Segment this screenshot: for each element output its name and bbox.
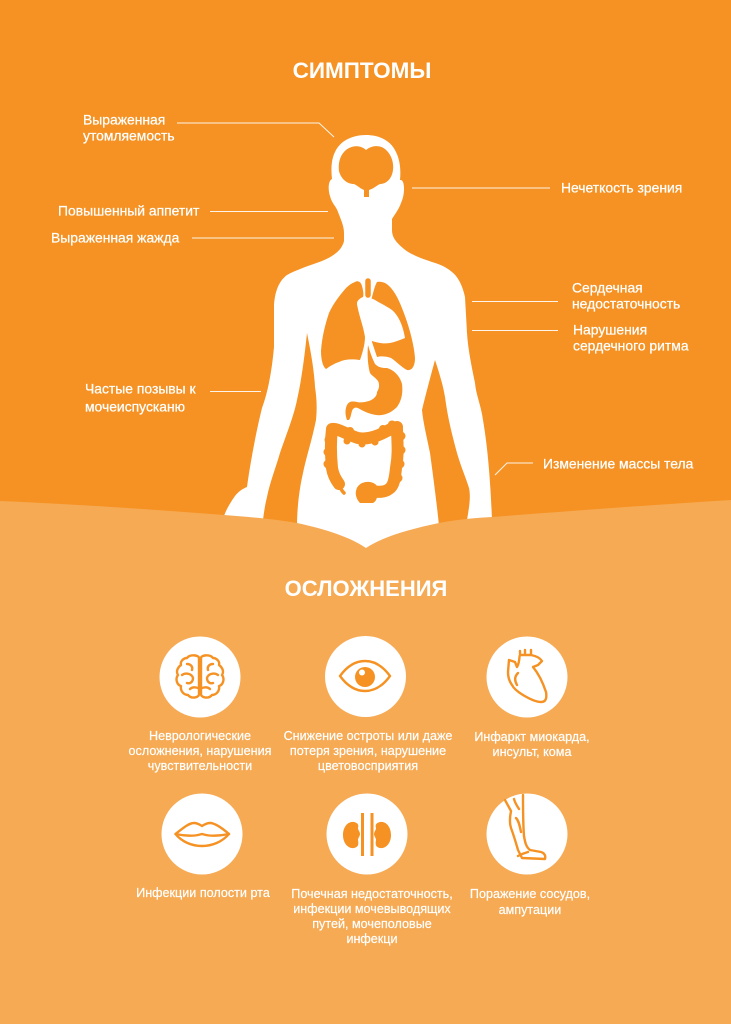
icon: brain [160,636,240,718]
right lung [371,282,415,370]
complication: neurological: осложнения, нарушения [129,744,271,758]
label: fatigue: утомляемость [83,128,175,144]
stomach [346,345,402,420]
complication: heart [474,636,590,759]
icon: lips [162,794,242,874]
heading: complications: ОСЛОЖНЕНИЯ [285,576,447,601]
label: heart failure [472,280,680,312]
complication: vision: цветовосприятия [318,759,418,773]
body silhouette with organs [224,135,492,552]
text: Неврологические [149,729,251,743]
complication: vision: потеря зрения, нарушение [290,744,446,758]
label: blurred vision: Нечеткость зрения [561,180,682,196]
text: Инфекции полости рта [136,886,270,900]
complication: neurological [129,636,271,773]
complication: kidneys [291,794,453,946]
panel: complications background [0,500,731,1024]
label: fatigue [83,112,334,144]
text: Инфаркт миокарда, [474,730,590,744]
icon: eye [325,636,406,717]
complication: kidneys: путей, мочеполовые [312,917,432,931]
complication: vessels: ампутации [499,903,561,917]
complication: kidneys: инфекции мочевыводящих [293,902,451,916]
label: frequent urination: мочеиспусканю [85,398,185,414]
icon: kidneys [326,794,408,874]
label: increased appetite: Повышенный аппетит [58,202,200,218]
brain [339,146,393,197]
complication: heart: инсульт, кома [493,745,571,759]
icon: heart [486,636,568,718]
text: Поражение сосудов, [470,887,590,901]
complication: vision [284,636,452,773]
label: weight change: Изменение массы тела [543,456,694,472]
complication: neurological: чувствительности [148,759,252,773]
label: weight change [495,456,694,475]
label: heart failure: Сердечная [572,280,643,296]
label: frequent urination [85,380,261,414]
complication: kidneys: инфекци [346,932,398,946]
heart [357,297,405,343]
colon [324,420,406,503]
text: Снижение остроты или даже [284,729,452,743]
icon: leg [486,794,568,874]
label: arrhythmia: сердечного ритма [573,338,689,354]
complication: mouth [136,794,270,900]
label: fatigue: Выраженная [83,112,165,128]
heading: symptoms: СИМПТОМЫ [293,58,431,83]
text: Почечная недостаточность, [291,887,453,901]
label: heart failure: недостаточность [572,296,680,312]
label: arrhythmia: Нарушения [573,322,647,338]
label: frequent urination: Частые позывы к [85,380,197,396]
trachea [365,281,371,295]
left lung [321,281,365,369]
label: thirst: Выраженная жажда [51,230,180,246]
complication: vessels [470,794,590,917]
body outline [224,135,492,552]
label: arrhythmia [472,322,689,354]
